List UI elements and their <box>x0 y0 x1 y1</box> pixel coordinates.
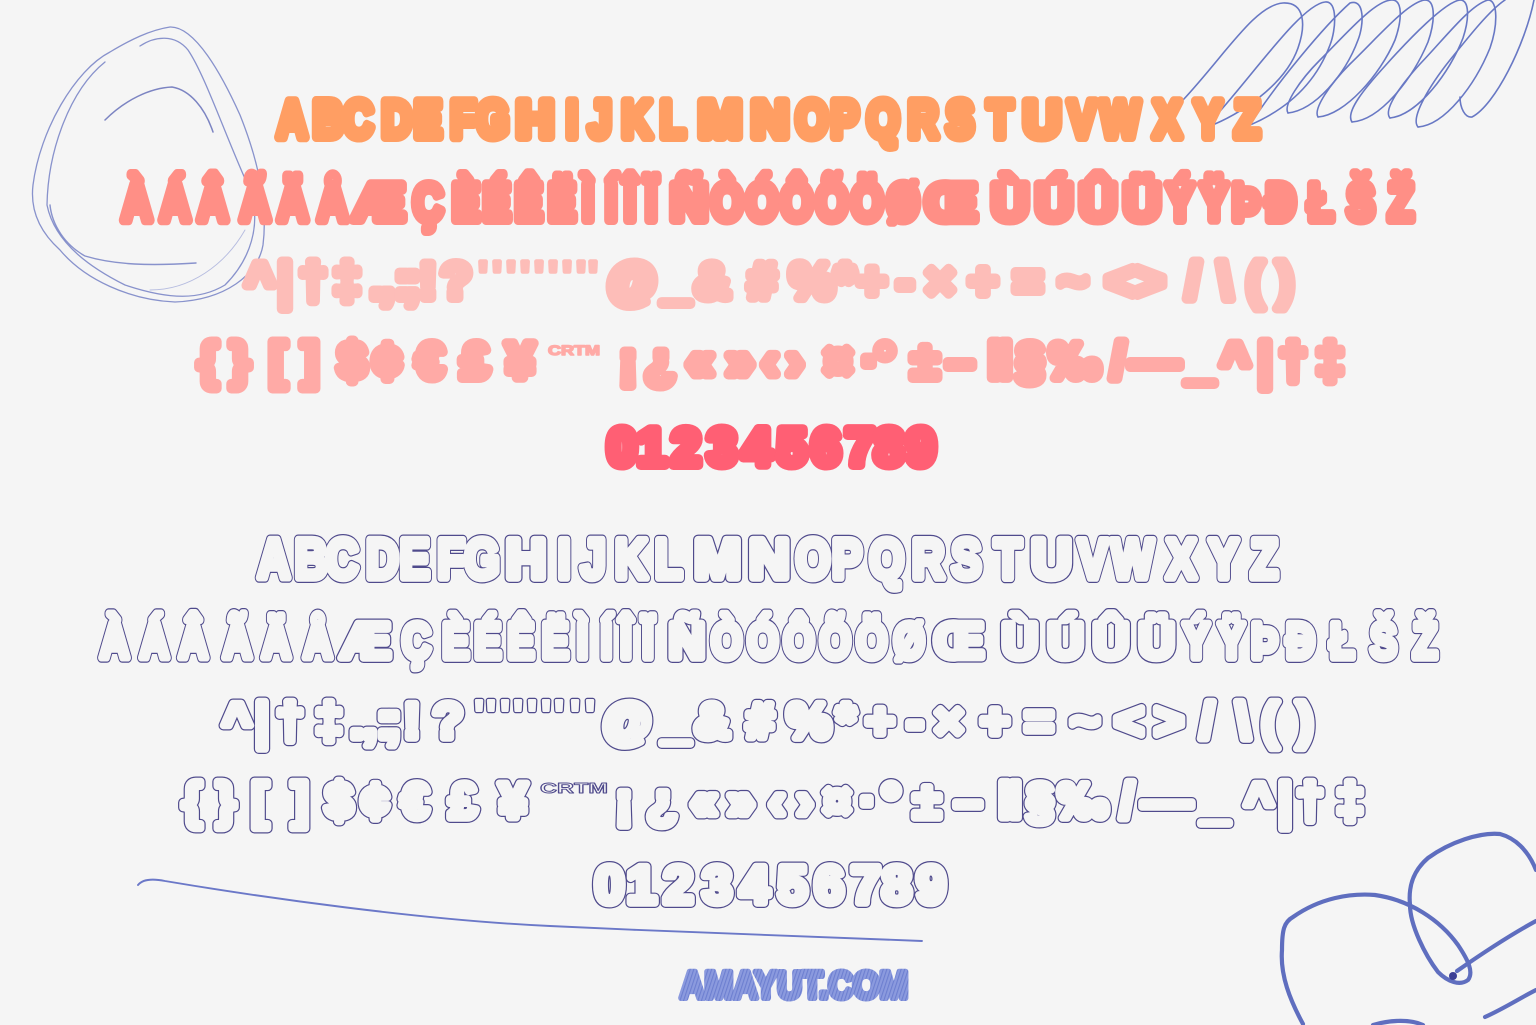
outline row: accented capitals: ÆÑŒÙÚÛÜ <box>341 612 1175 669</box>
outline row: punctuation and symbols: ''''''''' <box>474 693 595 737</box>
outline row: brackets, currency and marks: CRTM <box>540 780 608 797</box>
filled row: accented capitals: ÀÁÂÃÄÅÇÈÉÊËÌÍÎÏÒÓÔÕÖØÝŸÞÐŁŠŽ <box>122 173 1414 231</box>
filled row: accented capitals: ÆÑŒÙÚÛÜ <box>353 173 1161 232</box>
outline row: punctuation and symbols: ^|†‡.,:;!?@_&#%*+-×÷=~<>/\() <box>222 693 1313 750</box>
filled row: uppercase alphabet: ABCDEFGIJKLOPQRSTVWXYZ <box>277 90 1260 148</box>
outline row: uppercase alphabet: HMNU <box>506 527 1072 590</box>
filled row: punctuation and symbols: ^|†‡.,:;!?@_&#%*+-×÷=~<>/\() <box>245 253 1293 310</box>
filled row: brackets, currency and marks: {}[]$¢€£¥¡¿«»‹›¤·°±–‖§‰/—_^|†‡ <box>198 333 1344 390</box>
scribble: pen hand line <box>138 880 922 941</box>
outline row: uppercase alphabet: HMNU <box>506 527 1072 590</box>
scribble: pen circle top left <box>32 27 264 302</box>
outline row: numerals: 0123456789 <box>595 856 946 915</box>
outline row: punctuation and symbols: ''''''''' <box>474 693 595 737</box>
filled row: punctuation and symbols: ''''''''' <box>478 254 598 298</box>
filled row: uppercase alphabet: HMNU <box>516 91 1061 149</box>
outline row: brackets, currency and marks: {}[]$¢€£¥¡¿«»‹›¤·°±–‖§‰/—_^|†‡ <box>182 773 1364 830</box>
outline row: uppercase alphabet: ABCDEFGIJKLOPQRSTVWXYZ <box>258 527 1278 590</box>
outline row: brackets, currency and marks: {}[]$¢€£¥¡¿«»‹›¤·°±–‖§‰/—_^|†‡ <box>182 773 1364 830</box>
outline row: punctuation and symbols: ^|†‡.,:;!?@_&#%*+-×÷=~<>/\() <box>222 693 1313 750</box>
outline row: uppercase alphabet: ABCDEFGIJKLOPQRSTVWXYZ <box>258 527 1278 590</box>
filled row: brackets, currency and marks: CRTM <box>548 342 600 358</box>
outline row: accented capitals: ÆÑŒÙÚÛÜ <box>341 612 1175 669</box>
website wordmark: AMAYUT.COM <box>680 965 908 1007</box>
filled row: numerals: 0123456789 <box>608 419 935 477</box>
outline row: numerals: 0123456789 <box>595 856 946 915</box>
scribble: pen heart bottom right <box>1282 834 1536 1025</box>
scribble: pen spiral top right <box>1183 0 1534 128</box>
outline row: accented capitals: ÀÁÂÃÄÅÇÈÉÊËÌÍÎÏÒÓÔÕÖØÝŸÞÐŁŠŽ <box>100 613 1437 669</box>
outline row: accented capitals: ÀÁÂÃÄÅÇÈÉÊËÌÍÎÏÒÓÔÕÖØÝŸÞÐŁŠŽ <box>100 613 1437 669</box>
